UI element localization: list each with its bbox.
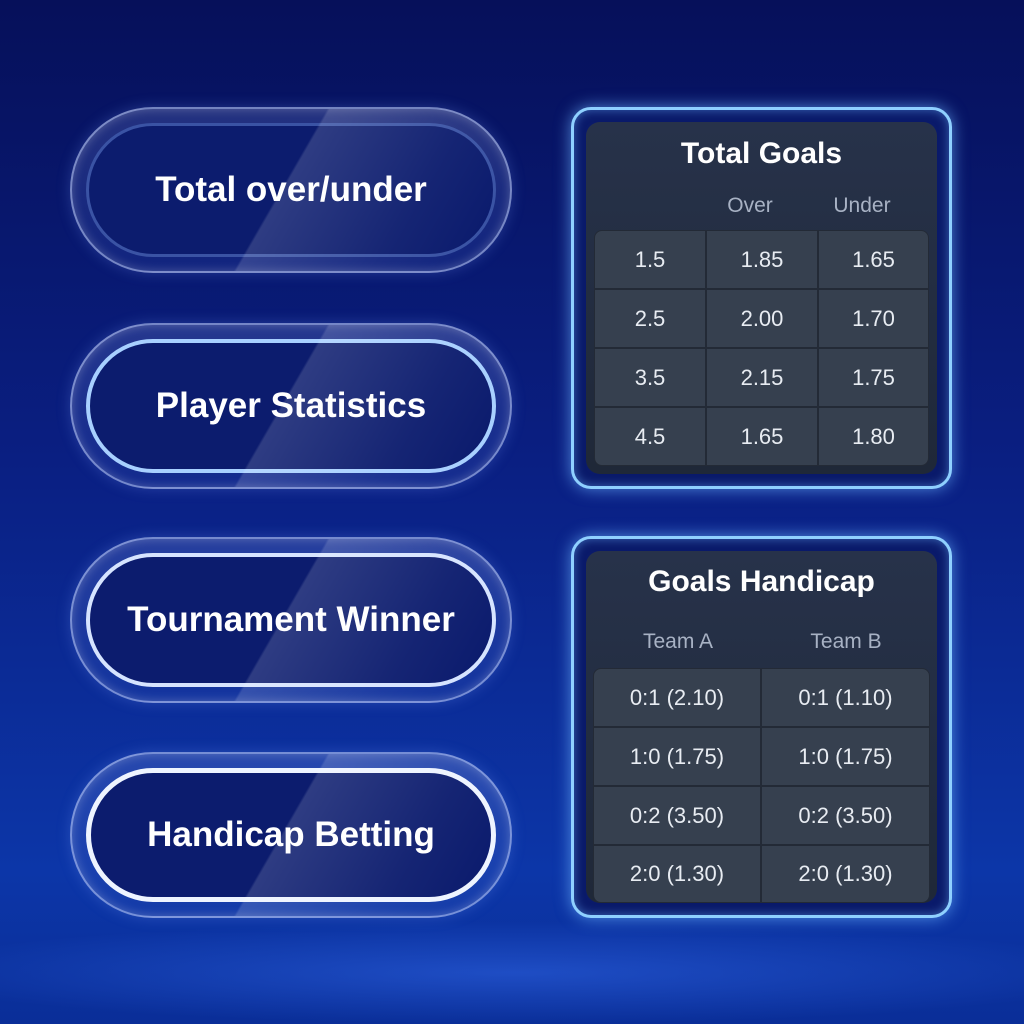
- table rows: 1.65: [852, 246, 895, 272]
- table rows: [594, 230, 929, 465]
- pill: Tournament Winner: Tournament Winner: [127, 600, 455, 639]
- table rows: [593, 668, 930, 903]
- table headers: Under: [833, 194, 891, 217]
- table headers: Team B: [810, 630, 882, 653]
- panel: Goals Handicap: [571, 536, 952, 918]
- table rows: 1.80: [852, 424, 895, 448]
- table rows: 2.5: [635, 306, 665, 330]
- pill: Handicap Betting: [70, 752, 512, 918]
- table rows: 2.15: [741, 364, 783, 390]
- pill: Tournament Winner: [70, 537, 512, 703]
- table rows: 0:1 (2.10): [630, 684, 724, 710]
- table rows: 2.00: [741, 306, 783, 330]
- pill: Player Statistics: [70, 323, 512, 489]
- table headers: Team A: [643, 630, 713, 653]
- table headers: Over: [727, 194, 773, 217]
- heading: Total Goals: [681, 137, 842, 170]
- table headers: [727, 194, 891, 217]
- table headers: [643, 630, 882, 653]
- table rows: 3.5: [635, 364, 665, 390]
- table rows: 4.5: [635, 424, 665, 448]
- table rows: 0:2 (3.50): [798, 802, 893, 828]
- table rows: 1.65: [741, 424, 783, 448]
- table rows: 1.85: [741, 246, 783, 272]
- panel: Total Goals: [571, 107, 952, 489]
- table rows: 0:2 (3.50): [630, 802, 724, 828]
- heading: Goals Handicap: [648, 565, 875, 598]
- table rows: 1.70: [852, 306, 895, 330]
- table rows: 2:0 (1.30): [798, 861, 893, 886]
- table rows: 1.5: [635, 246, 665, 272]
- table rows: 1:0 (1.75): [630, 744, 724, 768]
- table rows: 2:0 (1.30): [630, 861, 724, 886]
- pill: Player Statistics: Player Statistics: [156, 386, 426, 425]
- pill: Total over/under: Total over/under: [155, 170, 427, 209]
- table rows: 1.75: [852, 364, 895, 390]
- pill: Handicap Betting: Handicap Betting: [147, 815, 435, 854]
- pill: Total over/under: [70, 107, 512, 273]
- table rows: 1:0 (1.75): [798, 744, 893, 768]
- table rows: 0:1 (1.10): [798, 684, 893, 710]
